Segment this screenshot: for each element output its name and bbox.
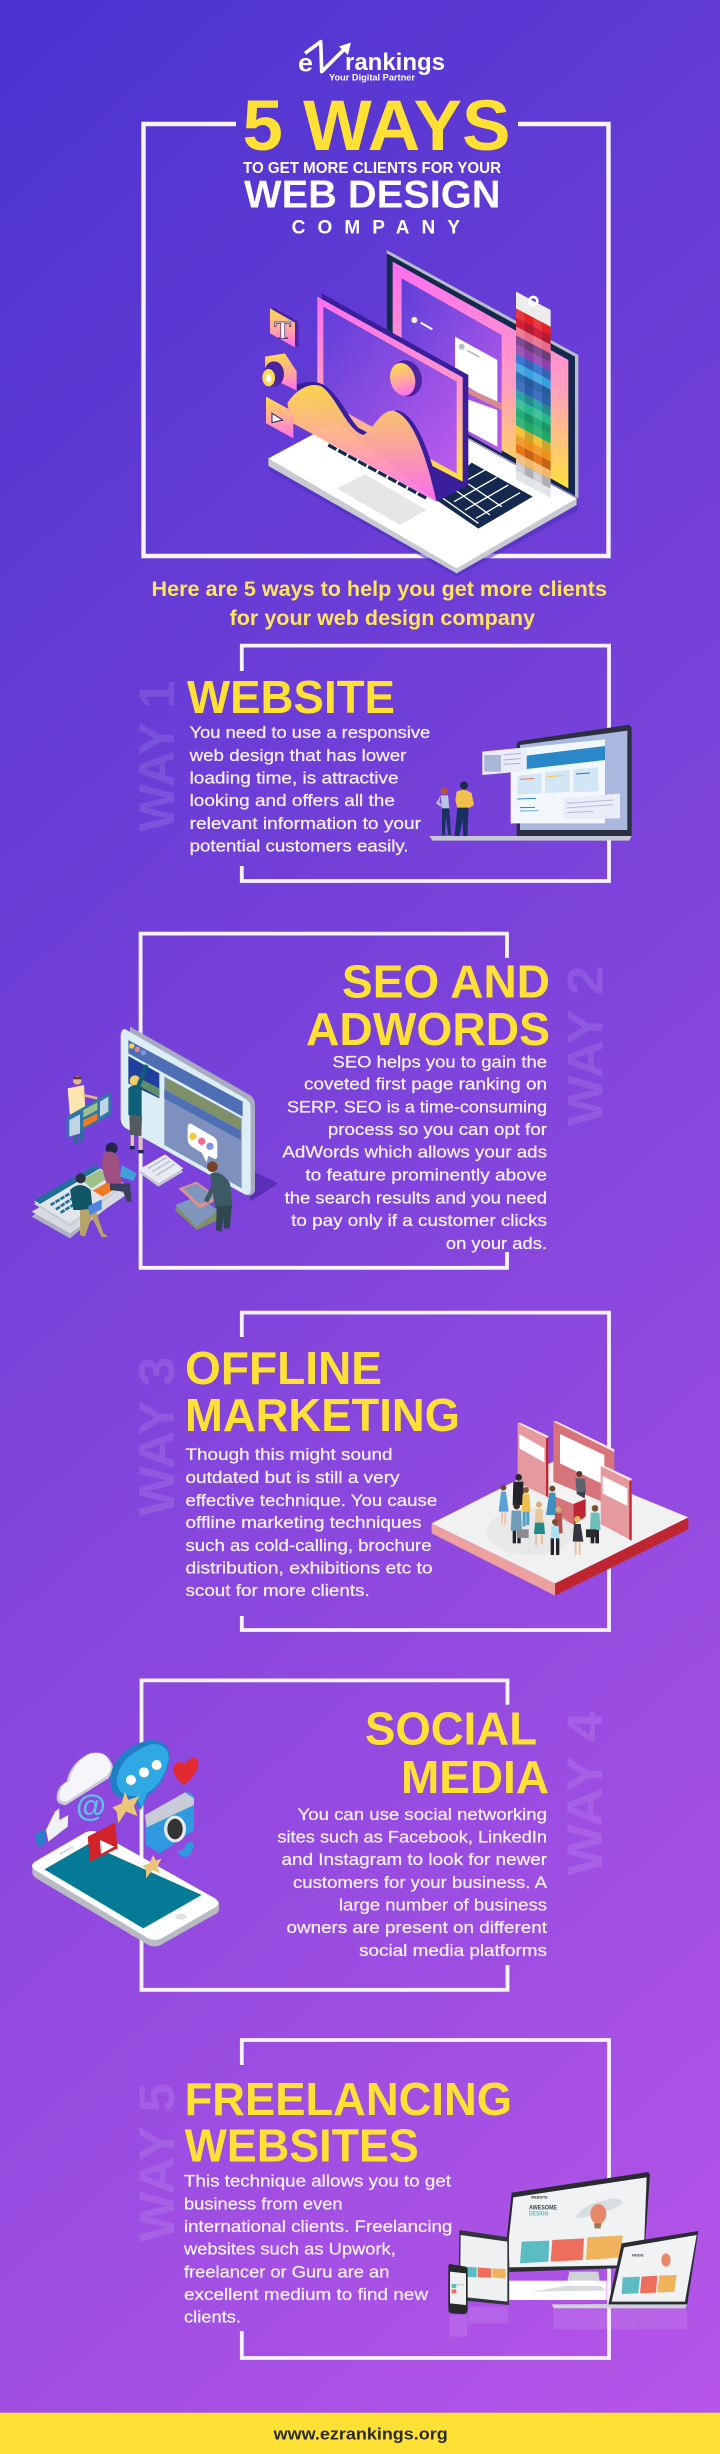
way 2 body: to pay only if a customer clicks	[291, 1211, 547, 1230]
laptop base	[268, 395, 578, 577]
way 3 heading: MARKETING	[185, 1389, 460, 1441]
intro text: for your web design company	[230, 606, 535, 630]
person: seated man	[70, 1173, 108, 1237]
way 3 label: WAY 3	[129, 1357, 185, 1516]
colour swatch strip	[516, 292, 551, 498]
image window	[317, 293, 468, 500]
way 2 body: on your ads.	[446, 1234, 547, 1253]
hero frame	[144, 124, 608, 556]
intro text	[152, 577, 607, 630]
way 2 body: AdWords which allows your ads	[282, 1143, 547, 1162]
icon: triangle	[266, 397, 293, 438]
way 3 body: distribution, exhibitions etc to	[186, 1558, 433, 1577]
way 2 heading	[306, 955, 550, 1055]
way 5 heading	[185, 2073, 512, 2172]
way 2 body: SEO helps you to gain the	[332, 1052, 547, 1072]
way 5 heading: FREELANCING	[185, 2073, 512, 2125]
way 1 label: WAY 1	[129, 681, 185, 832]
illustration: laptop and two people	[429, 725, 632, 841]
person: woman at board	[128, 1065, 147, 1153]
way 2 heading: SEO AND	[342, 955, 550, 1007]
icon: type	[270, 307, 298, 347]
icon: heart	[173, 1758, 198, 1785]
title: TO GET MORE CLIENTS FOR YOUR	[243, 160, 501, 177]
footer bar: www.ezrankings.org	[273, 2424, 448, 2443]
way 2 body: process so you can opt for	[328, 1120, 547, 1139]
tablet	[458, 2230, 509, 2305]
booth wall centre	[553, 1421, 614, 1507]
booth wall right	[601, 1465, 632, 1541]
way 4 body: sites such as Facebook, LinkedIn	[277, 1827, 547, 1846]
illustration: phone with social icons	[32, 1740, 219, 1947]
person: seated woman	[102, 1142, 137, 1202]
way 3 body: scout for more clients.	[186, 1581, 370, 1600]
icon: chat bubble	[110, 1740, 170, 1810]
way 3 body: Though this might sound	[186, 1445, 392, 1464]
way 5 body: This technique allows you to get	[184, 2172, 451, 2191]
paper stack	[139, 1154, 183, 1187]
icon: bird	[177, 1842, 194, 1857]
illustration: exhibition booth	[432, 1421, 688, 1596]
way 2 body: the search results and you need	[285, 1188, 547, 1207]
panel: way 3	[129, 1313, 688, 1630]
panel: way 5	[129, 2040, 698, 2358]
way 4 body: social media platforms	[359, 1941, 547, 1960]
way 1 body: web design that has lower	[188, 746, 407, 765]
way 4 body: customers for your business. A	[293, 1873, 548, 1892]
speech bubble	[188, 1123, 217, 1163]
hero illustration: laptop with design tools	[262, 250, 578, 577]
way 3 body: such as cold-calling, brochure	[186, 1536, 432, 1555]
icon: star top	[112, 1792, 139, 1823]
intro text: Here are 5 ways to help you get more clients	[152, 577, 607, 601]
icon: type: T	[274, 317, 291, 345]
logo: rankings	[345, 49, 445, 76]
way 4 heading	[365, 1703, 549, 1803]
way 1 heading: WEBSITE	[187, 671, 395, 723]
way 3 heading: OFFLINE	[185, 1342, 382, 1394]
newspaper stack with people	[32, 1165, 127, 1238]
booth wall left	[518, 1423, 548, 1497]
monitor: DESIGN	[529, 2211, 548, 2217]
way 3 heading	[185, 1342, 460, 1441]
panel: way 2	[32, 934, 613, 1268]
icon: thumbs up	[35, 1808, 68, 1847]
reflections	[449, 2307, 687, 2337]
way 4 heading: SOCIAL	[365, 1703, 537, 1755]
laptop screen	[387, 250, 578, 498]
way 1 body: relevant information to your	[190, 814, 421, 833]
board	[121, 1027, 278, 1202]
way 5 body: freelancer or Guru are an	[184, 2262, 389, 2281]
person: woman	[436, 787, 451, 835]
logo	[298, 42, 445, 84]
way 4 body: owners are present on different	[286, 1918, 547, 1937]
way 5 body	[183, 2172, 452, 2327]
way 2 body: SERP. SEO is a time-consuming	[287, 1098, 547, 1117]
way 4 body: large number of business	[339, 1895, 547, 1914]
title: 5 WAYS	[242, 87, 510, 166]
way 1 body: loading time, is attractive	[190, 768, 399, 788]
person: staff	[575, 1471, 586, 1499]
footer bar	[0, 2413, 720, 2454]
icon: video play	[88, 1823, 118, 1862]
laptop	[552, 2231, 698, 2308]
way 5 body: international clients. Freelancing	[184, 2217, 452, 2236]
title: COMPANY	[292, 218, 460, 238]
way 1 body: potential customers easily.	[190, 837, 409, 856]
monitor: WEBSITE	[531, 2196, 548, 2200]
panel: way 4	[32, 1680, 613, 1990]
panel: way 1	[129, 646, 632, 881]
way 3 body	[186, 1445, 437, 1600]
icon: star bottom	[142, 1855, 162, 1878]
way 3 body: effective technique. You cause	[186, 1491, 437, 1510]
person: man	[455, 781, 474, 836]
way 5 heading: WEBSITES	[185, 2120, 419, 2172]
icon: camera	[145, 1792, 194, 1853]
icon: at sign: @	[76, 1789, 106, 1823]
illustration: team building a web page	[32, 1027, 278, 1238]
way 5 body: business from even	[184, 2194, 343, 2213]
way 2 heading: ADWORDS	[306, 1003, 550, 1055]
way 4 label: WAY 4	[557, 1711, 613, 1876]
way 4 body: and Instagram to look for newer	[282, 1850, 547, 1869]
monitor: AWESOME	[529, 2205, 557, 2212]
logo: e	[298, 50, 313, 78]
way 4 body	[277, 1805, 548, 1960]
way 4 body: You can use social networking	[298, 1805, 547, 1824]
way 5 body: clients.	[184, 2308, 241, 2327]
person: man with sign	[67, 1076, 111, 1143]
counter	[552, 1488, 586, 1525]
way 4 heading: MEDIA	[401, 1751, 549, 1803]
illustration: responsive devices	[448, 2172, 698, 2337]
way 1 body	[188, 723, 430, 856]
title	[242, 87, 510, 238]
monitor	[507, 2172, 650, 2300]
mountains	[287, 382, 442, 502]
group of visitors	[487, 1474, 601, 1555]
papers and man at desk	[175, 1161, 233, 1232]
icon: cloud	[57, 1753, 113, 1805]
phone	[448, 2264, 468, 2314]
way 1 body: looking and offers all the	[190, 791, 395, 810]
way 1 body: You need to use a responsive	[190, 723, 430, 742]
way 5 label: WAY 5	[129, 2083, 185, 2242]
way 2 body	[282, 1052, 547, 1253]
way 5 body: excellent medium to find new	[184, 2285, 429, 2304]
way 2 label: WAY 2	[558, 966, 614, 1126]
laptop: AWESOME	[632, 2253, 644, 2258]
logo: Your Digital Partner	[329, 73, 415, 84]
way 5 body: websites such as Upwork,	[183, 2240, 396, 2259]
way 2 body: to feature prominently above	[305, 1166, 547, 1185]
way 3 body: outdated but is still a very	[186, 1468, 400, 1487]
way 2 body: coveted first page ranking on	[304, 1075, 547, 1094]
title: WEB DESIGN	[244, 173, 500, 216]
way 3 body: offline marketing techniques	[186, 1513, 422, 1532]
icon: camera	[262, 353, 297, 391]
phone	[32, 1831, 219, 1947]
